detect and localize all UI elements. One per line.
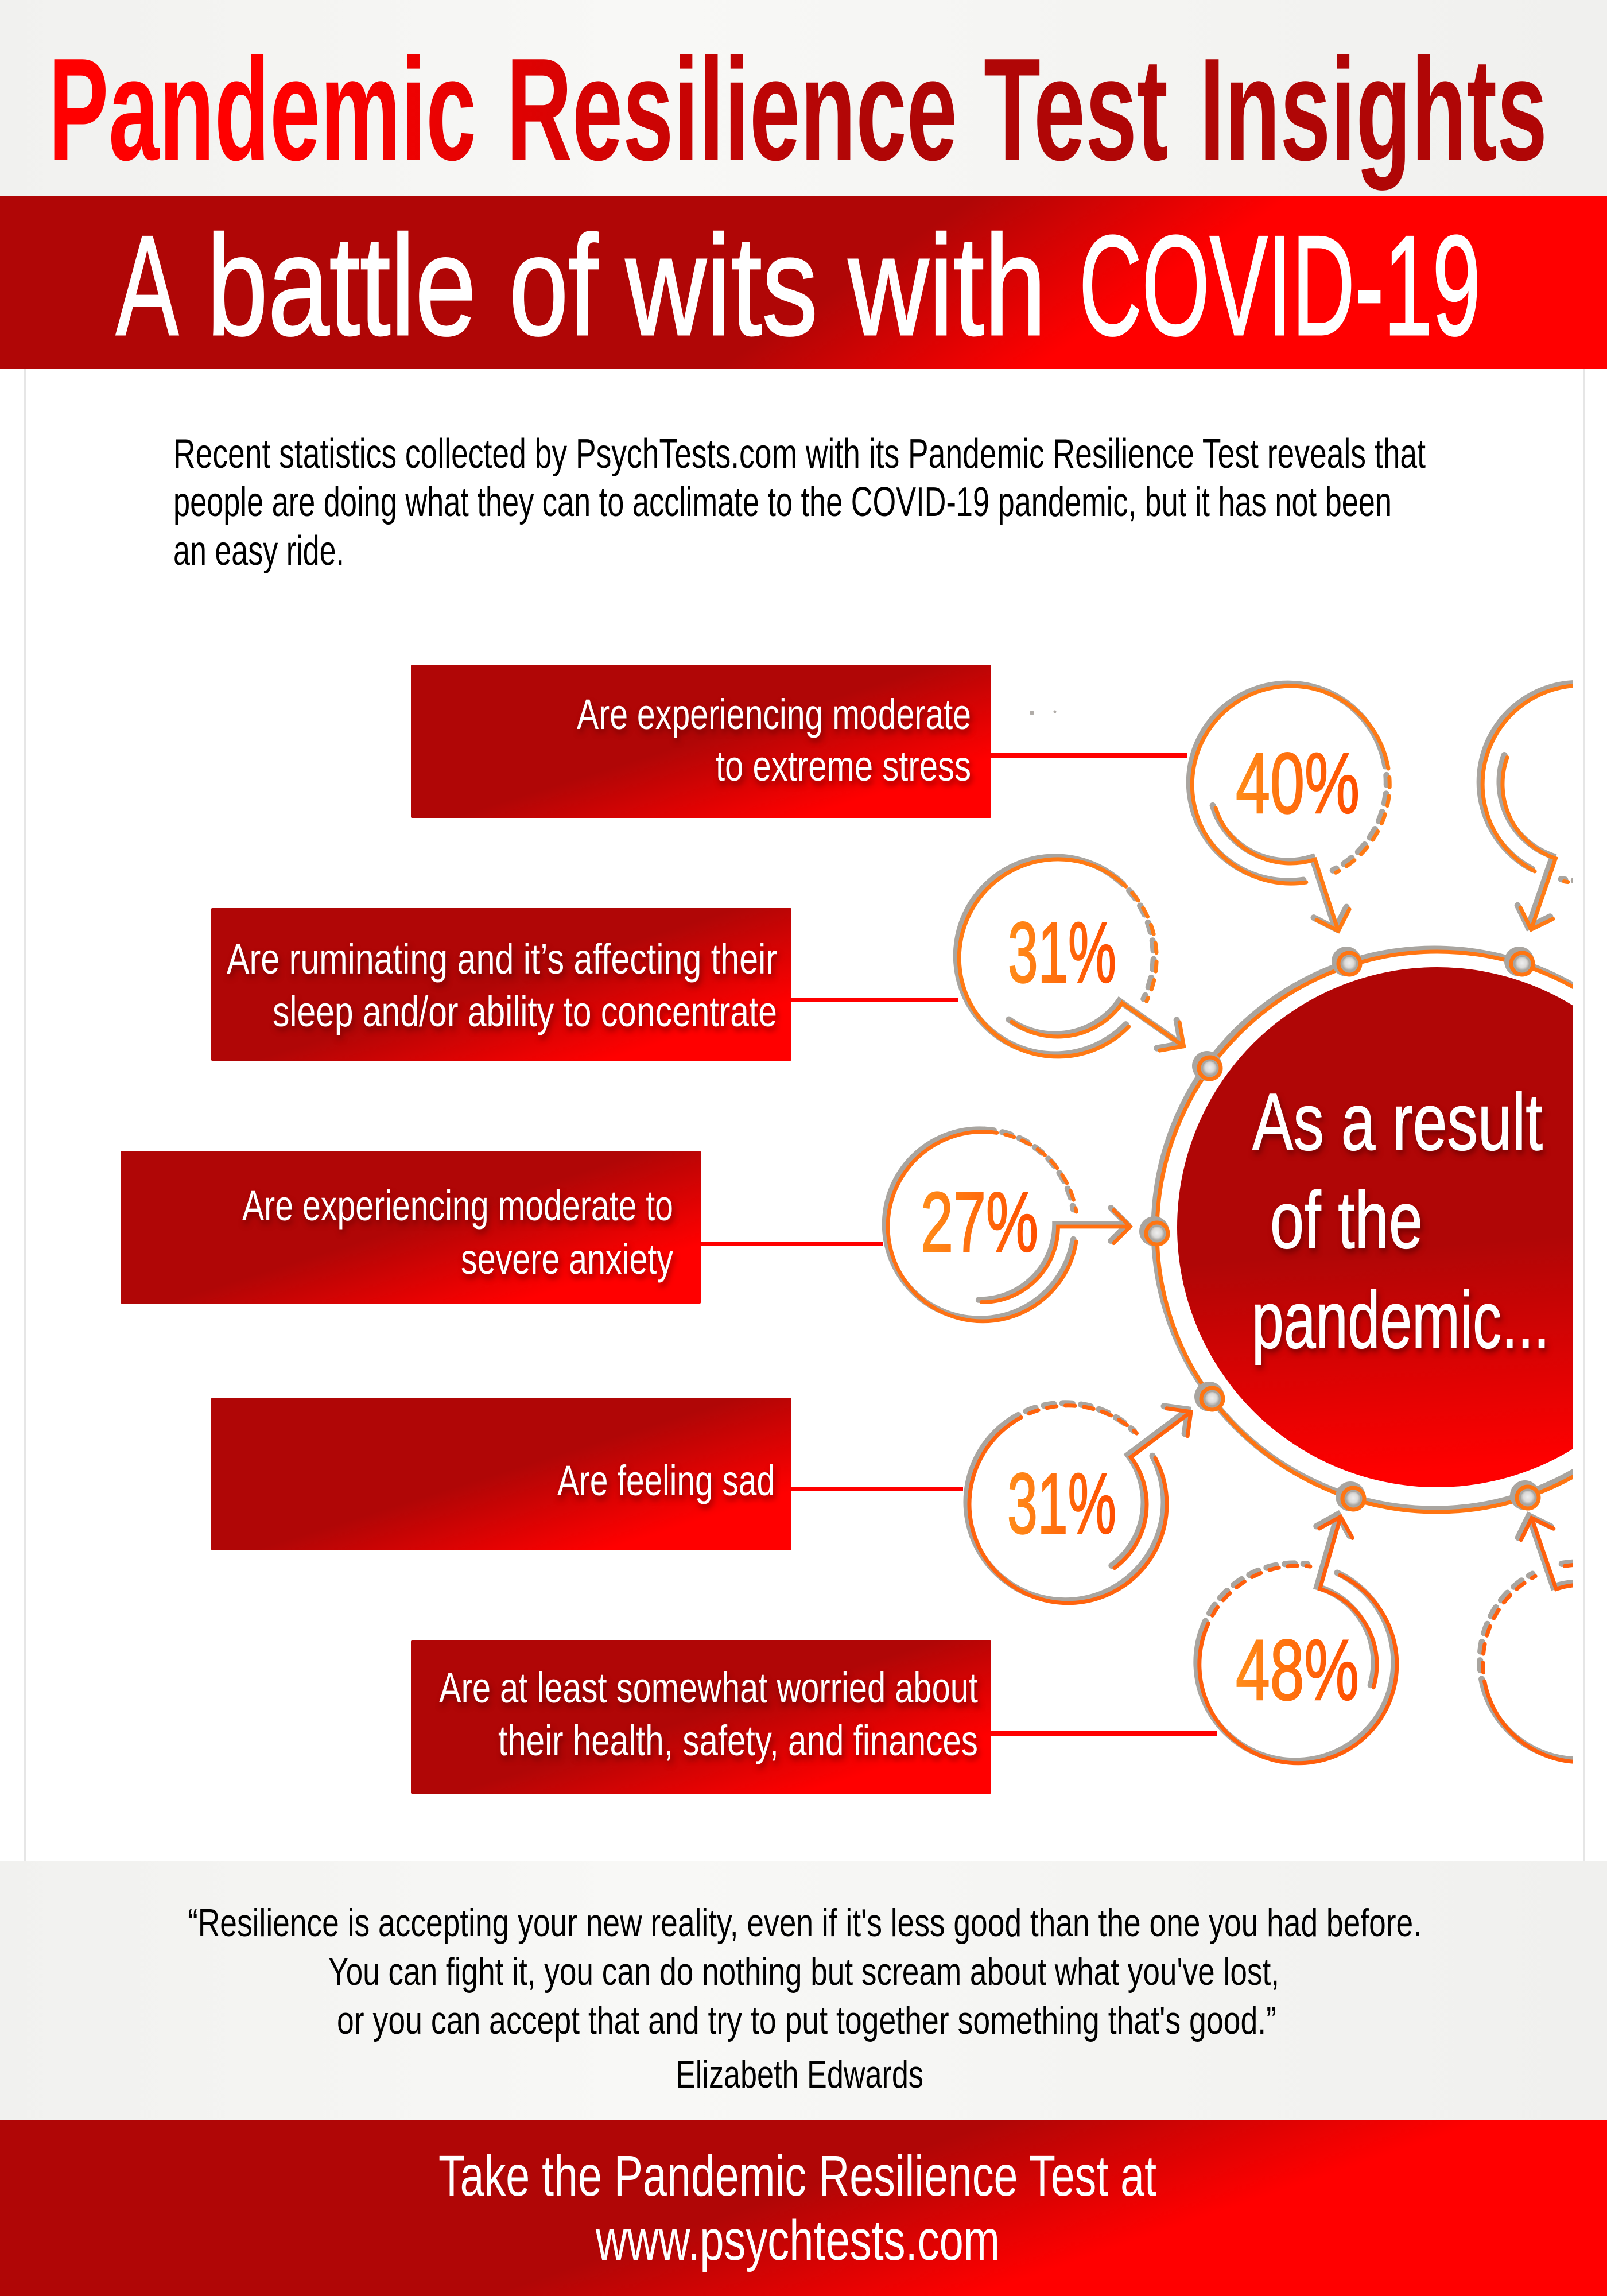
intro text: an easy ride. xyxy=(173,528,344,574)
anxiety text: severe anxiety xyxy=(461,1235,673,1283)
ruminating text: Are ruminating and it’s affecting their xyxy=(227,935,777,983)
stat: 31 percent sad xyxy=(927,1331,1250,1643)
title: Pandemic xyxy=(48,28,476,191)
connector lines xyxy=(701,753,1217,1736)
31 percent sad value: 31% xyxy=(1007,1455,1116,1552)
worried text: Are at least somewhat worried about xyxy=(439,1664,978,1712)
worried text: their health, safety, and finances xyxy=(498,1717,978,1764)
ruminating text xyxy=(227,935,777,1035)
anxiety text xyxy=(242,1182,673,1283)
subtitle band xyxy=(0,196,1607,369)
footer call to action: www.psychtests.com xyxy=(595,2208,1000,2272)
subtitle: with xyxy=(848,205,1046,365)
sad text: Are feeling sad xyxy=(557,1457,775,1504)
panel: anxiety label xyxy=(121,1151,701,1304)
icon: blank bubble top right xyxy=(1476,680,1573,932)
footer call to action: Take the Pandemic Resilience Test at xyxy=(438,2144,1156,2208)
left page border xyxy=(24,369,26,1861)
icon: 27 percent arrow bubble xyxy=(885,1130,1130,1321)
title: Test xyxy=(984,28,1168,191)
right page border xyxy=(1583,369,1585,1861)
stat: 27 percent xyxy=(885,1130,1130,1321)
worried text xyxy=(439,1664,978,1764)
panel: worried label xyxy=(411,1640,991,1794)
quote band xyxy=(0,1861,1607,2120)
stress text: to extreme stress xyxy=(716,742,971,790)
31 percent value: 31% xyxy=(1008,904,1116,1000)
quote text: or you can accept that and try to put together something that's good.” xyxy=(337,1999,1276,2042)
panel: ruminating label xyxy=(211,908,791,1061)
48 percent value: 48% xyxy=(1236,1622,1359,1718)
ruminating text: sleep and/or ability to concentrate xyxy=(273,988,777,1035)
footer call to action xyxy=(438,2144,1156,2272)
icon: 31 percent arrow bubble xyxy=(918,818,1240,1127)
stat: 40 percent xyxy=(1164,658,1433,961)
stress text: Are experiencing moderate xyxy=(577,691,971,738)
hub nodes xyxy=(1139,947,1540,1511)
hub text xyxy=(1252,1076,1550,1365)
icon: 31 percent sad arrow bubble xyxy=(927,1331,1250,1643)
quote text xyxy=(188,1901,1422,2096)
quote text: Elizabeth Edwards xyxy=(676,2053,923,2096)
subtitle: A xyxy=(116,205,178,365)
intro text xyxy=(173,431,1426,574)
icon: 40 percent arrow bubble xyxy=(1164,658,1433,961)
icon: blank bubble bottom right xyxy=(1477,1511,1573,1764)
icon: 48 percent arrow bubble xyxy=(1173,1487,1435,1787)
hub ring xyxy=(1154,949,1607,1512)
panel: sad label xyxy=(211,1398,791,1550)
40 percent value: 40% xyxy=(1236,735,1360,831)
subtitle: of xyxy=(509,205,599,365)
title: Resilience xyxy=(506,28,957,191)
central hub xyxy=(1139,657,1607,1789)
subtitle: battle xyxy=(207,205,476,365)
title band xyxy=(0,0,1607,196)
footer band xyxy=(0,2120,1607,2296)
panel: stress label xyxy=(411,665,991,818)
subtitle: wits xyxy=(625,205,818,365)
stat: 31 percent ruminating xyxy=(918,818,1240,1127)
27 percent value: 27% xyxy=(921,1175,1038,1270)
anxiety text: Are experiencing moderate to xyxy=(242,1182,673,1230)
hub disc xyxy=(1177,967,1607,1487)
hub text: of the xyxy=(1270,1174,1423,1265)
stat: 48 percent xyxy=(1173,1487,1435,1787)
stray specks xyxy=(1030,711,1056,715)
quote text: You can fight it, you can do nothing but scream about what you've lost, xyxy=(328,1950,1279,1994)
stress text xyxy=(577,691,971,790)
